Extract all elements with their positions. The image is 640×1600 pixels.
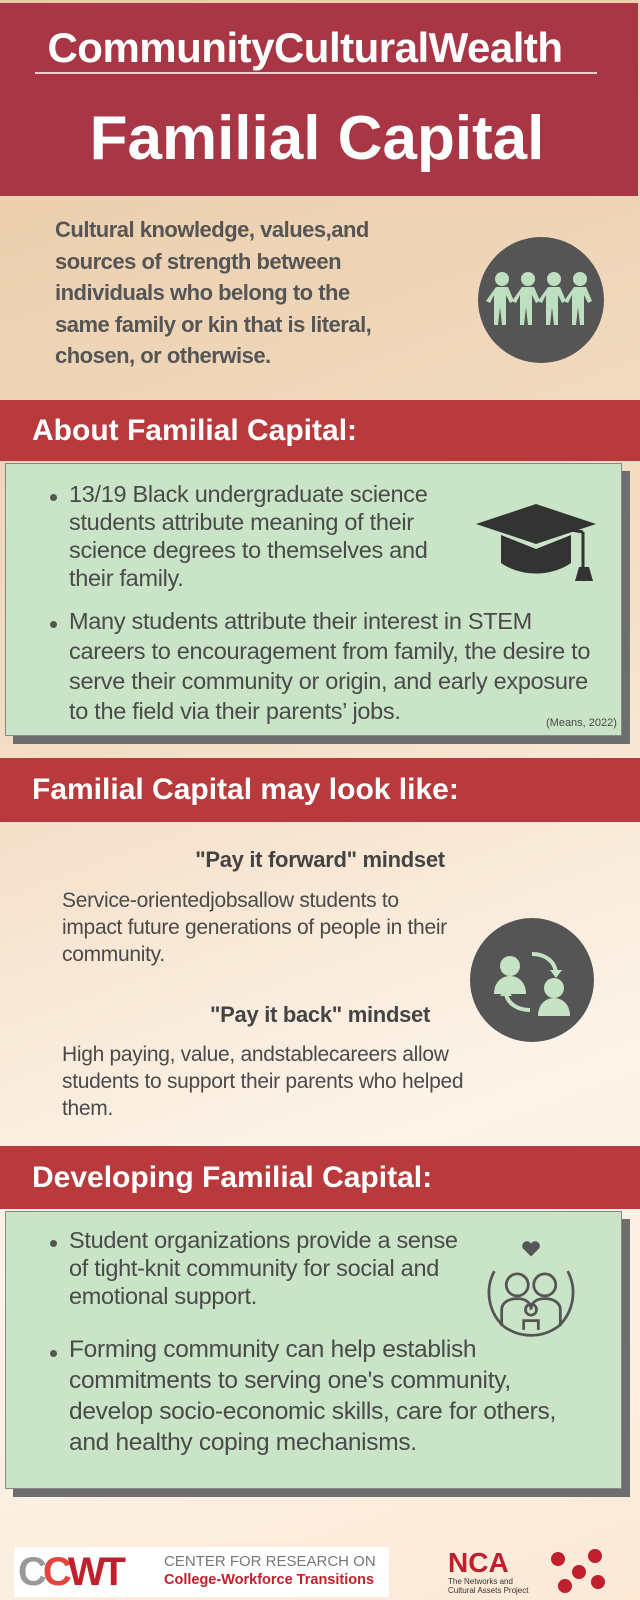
panel: developing: [5, 1211, 622, 1489]
bullet 2: Forming community can help establish: [69, 1336, 476, 1363]
text: pay it back: [62, 1043, 463, 1120]
bullet 2: [50, 608, 590, 724]
icon: exchange people: [470, 918, 594, 1042]
text: pay it forward: community.: [62, 943, 165, 966]
bullet 2: [50, 1336, 556, 1456]
text: pay it forward: Service-orientedjobsallow students to: [62, 889, 399, 912]
intro text: same family or kin that is literal,: [55, 312, 371, 336]
bullet 1: science degrees to themselves and: [69, 537, 427, 563]
subheading: pay it back: "Pay it back" mindset: [210, 1002, 430, 1027]
footer: logos: [14, 1547, 605, 1597]
text: pay it back: students to support their parents who helped: [62, 1070, 463, 1093]
text: pay it back: them.: [62, 1097, 113, 1120]
intro text: sources of strength between: [55, 248, 341, 274]
icon: graduation cap: [476, 504, 596, 581]
heading: Familial Capital: Familial Capital: [90, 104, 544, 173]
bullet 1: 13/19 Black undergraduate science: [69, 481, 428, 507]
bullet 2: Many students attribute their interest in STEM: [69, 608, 532, 634]
logo: NCA: [448, 1547, 605, 1595]
intro text: [55, 217, 371, 368]
section bar: developing: Developing Familial Capital:: [32, 1161, 432, 1194]
bullet 1: emotional support.: [69, 1283, 257, 1309]
logo: NCA: NCA: [448, 1547, 509, 1578]
bullet 1: [50, 1227, 458, 1309]
section bar: developing: [0, 1146, 640, 1209]
logo: CCWT: CENTER FOR RESEARCH ON: [164, 1553, 376, 1570]
subheading: pay it forward: "Pay it forward" mindset: [195, 847, 445, 872]
section bar: may look like: Familial Capital may look like:: [32, 773, 459, 806]
bullet 1: of tight-knit community for social and: [69, 1255, 439, 1281]
citation: (Means, 2022): [546, 717, 617, 729]
intro text: Cultural knowledge, values,and: [55, 217, 369, 242]
logo: CCWT: CCWT: [18, 1550, 122, 1594]
bullet 1: their family.: [69, 565, 184, 591]
bullet 2: commitments to serving one's community,: [69, 1367, 511, 1394]
bullet 2: careers to encouragement from family, the desire to: [69, 638, 590, 664]
logo: CCWT: [14, 1547, 389, 1597]
logo: NCA: The Networks and: [448, 1577, 513, 1586]
icon: family outline: [488, 1241, 574, 1337]
intro text: individuals who belong to the: [55, 280, 350, 305]
bullet 2: and healthy coping mechanisms.: [69, 1429, 417, 1456]
section bar: About Familial Capital: About Familial Capital:: [32, 414, 357, 447]
intro text: chosen, or otherwise.: [55, 343, 271, 368]
bullet 2: to the field via their parents’ jobs.: [69, 698, 401, 724]
header banner: [0, 3, 638, 196]
bullet 2: develop socio-economic skills, care for others,: [69, 1398, 556, 1425]
panel: about: [5, 463, 622, 736]
section bar: may look like: [0, 758, 640, 822]
text: pay it forward: impact future generations of people in their: [62, 916, 447, 939]
logo: CCWT: College-Workforce Transitions: [164, 1572, 374, 1588]
icon: people holding hands: [478, 237, 604, 363]
text: pay it forward: [62, 889, 447, 966]
title: Community Cultural Wealth: CommunityCulturalWealth: [47, 24, 563, 71]
bullet 1: students attribute meaning of their: [69, 509, 414, 535]
section bar: About Familial Capital: [0, 400, 640, 461]
logo: NCA: Cultural Assets Project: [448, 1586, 528, 1595]
bullet 2: serve their community or origin, and early exposure: [69, 668, 588, 694]
bullet 1: Student organizations provide a sense: [69, 1227, 458, 1253]
text: pay it back: High paying, value, andstablecareers allow: [62, 1043, 449, 1066]
bullet 1: [50, 481, 428, 591]
